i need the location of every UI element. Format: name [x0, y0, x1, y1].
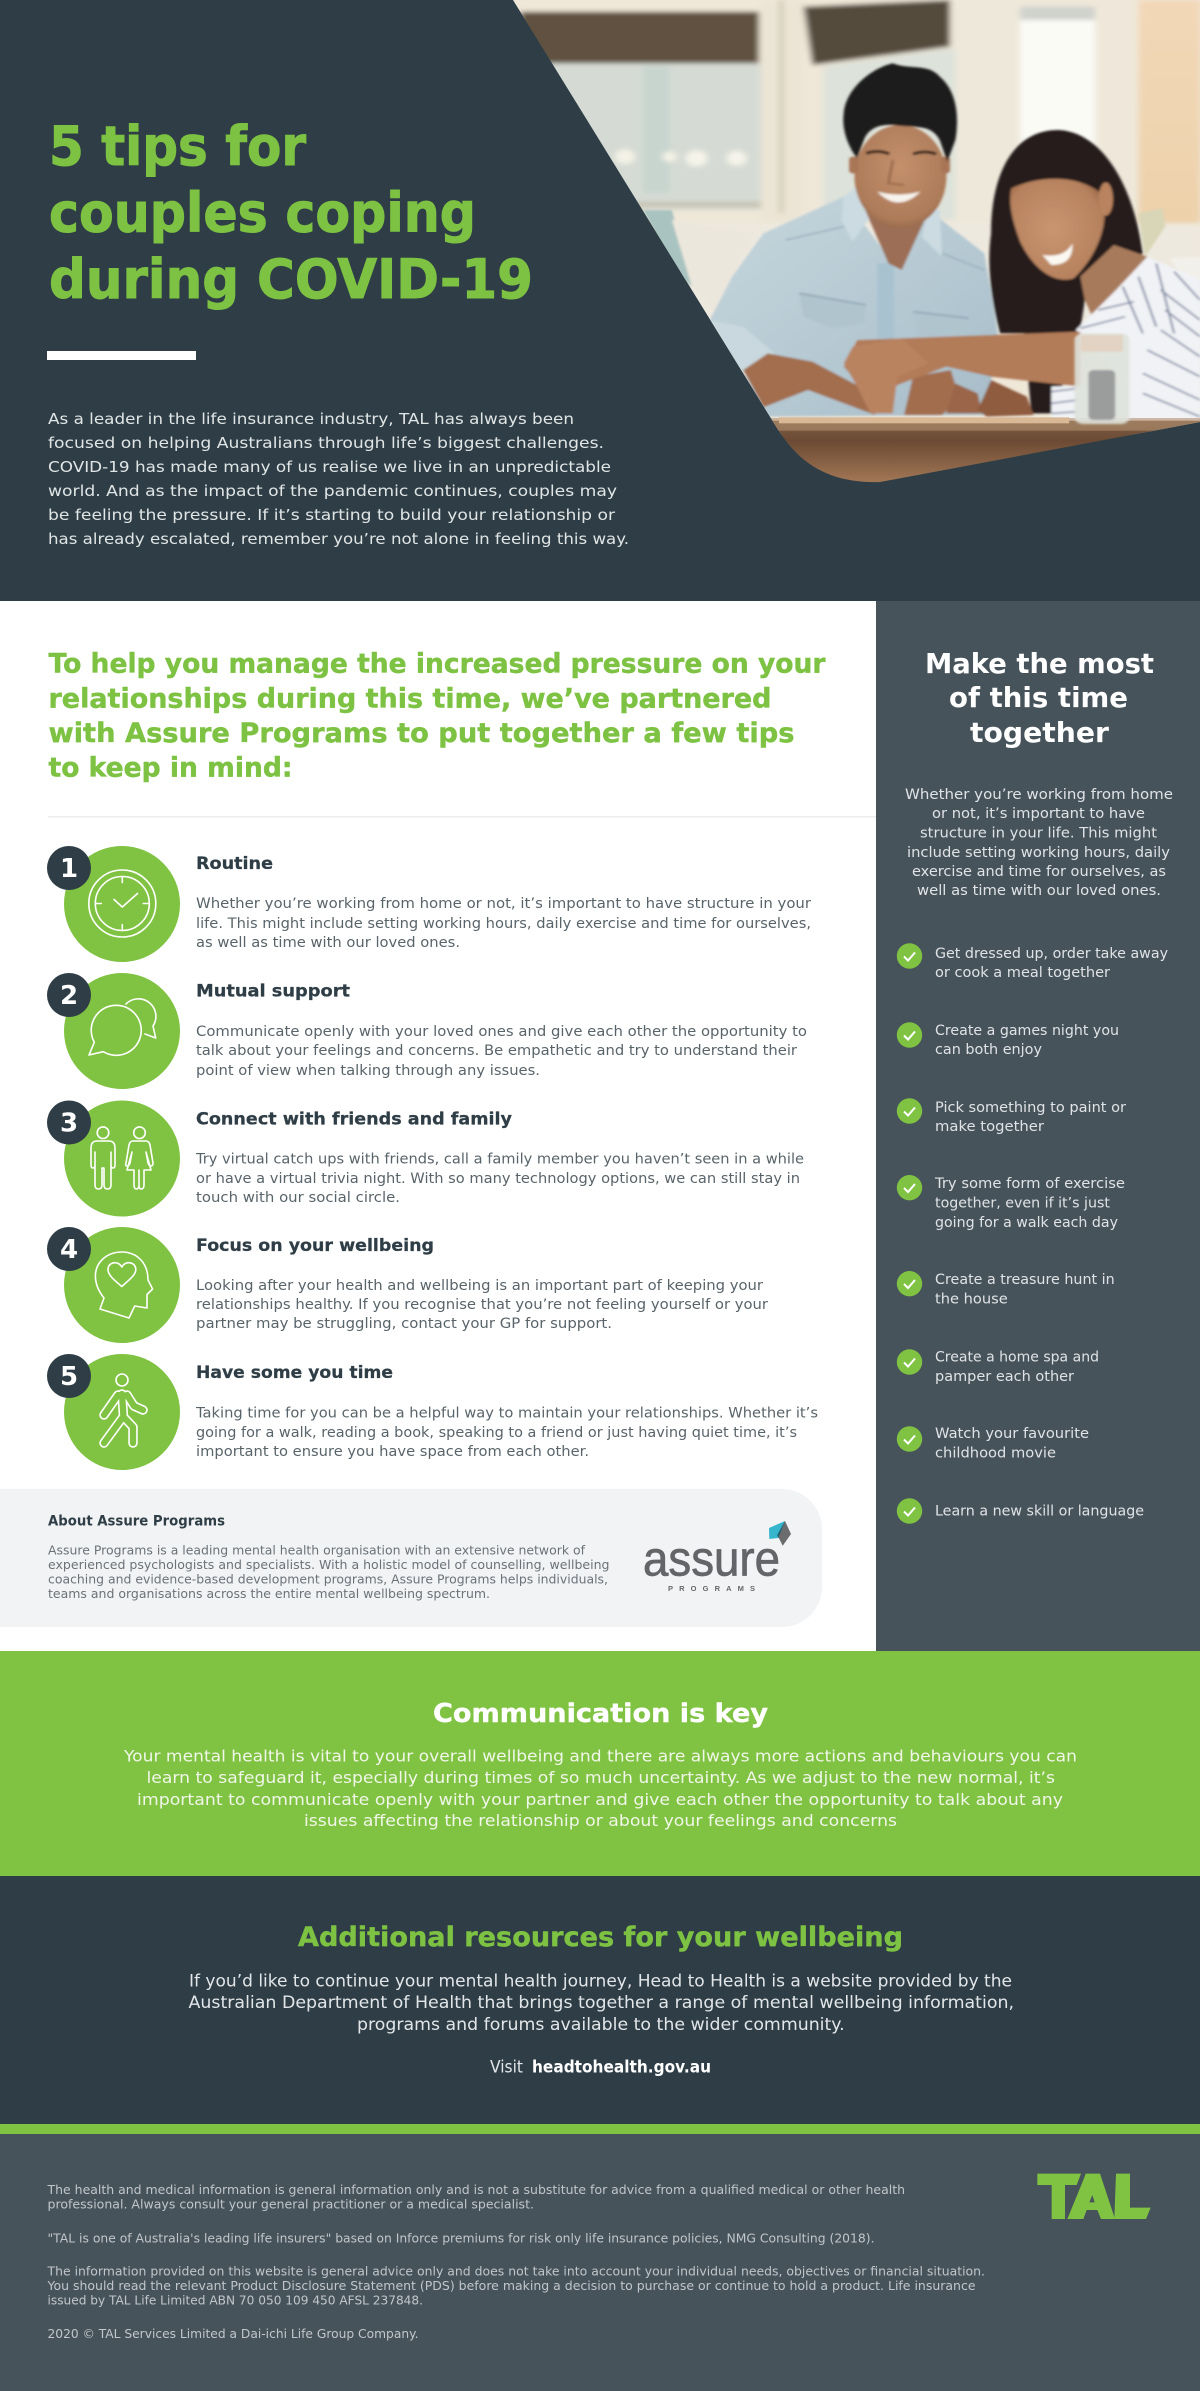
checklist item 5: the house	[935, 1292, 1008, 1308]
tip 4: focus on your wellbeing: 4	[60, 1235, 78, 1265]
intro text: focused on helping Australians through life’s biggest challenges.	[48, 434, 604, 452]
about text: coaching and evidence-based development programs, Assure Programs helps individuals,	[48, 1573, 608, 1587]
communication text	[123, 1747, 1077, 1830]
checklist item 1	[897, 943, 1168, 981]
side heading: of this time	[949, 681, 1128, 714]
tip 3 text	[195, 1109, 804, 1206]
about text: About Assure Programs	[48, 1514, 225, 1530]
tip 4 text: Focus on your wellbeing	[196, 1236, 434, 1256]
side heading: Make the most	[925, 647, 1154, 680]
tip 1 text: Routine	[196, 854, 273, 874]
about text	[48, 1514, 610, 1601]
intro text: be feeling the pressure. If it’s starting to build your relationship or	[48, 506, 616, 524]
resources heading: Additional resources for your wellbeing	[298, 1922, 903, 1953]
tip 1 text: Whether you’re working from home or not, it’s important to have structure in your	[196, 896, 811, 912]
intro text: COVID-19 has made many of us realise we live in an unpredictable	[48, 458, 611, 476]
intro text	[48, 410, 629, 548]
visit link: headtohealth.gov.au	[532, 2058, 711, 2077]
side paragraph: structure in your life. This might	[920, 826, 1158, 842]
man	[710, 197, 998, 417]
visit link: Visit	[490, 2058, 523, 2077]
panel: additional resources	[0, 1876, 1200, 2124]
checklist item 5: Create a treasure hunt in	[935, 1272, 1115, 1288]
photo: smiling couple at a table	[487, 0, 1200, 487]
communication text: Your mental health is vital to your overall wellbeing and there are always more actions and behaviours you can	[123, 1747, 1077, 1766]
section heading: to keep in mind:	[48, 753, 292, 784]
checklist item 6: pamper each other	[935, 1369, 1074, 1385]
tip 5 text: Have some you time	[196, 1363, 393, 1383]
side paragraph: exercise and time for ourselves, as	[912, 864, 1166, 880]
resources text	[188, 1972, 1014, 2034]
resources text: Australian Department of Health that brings together a range of mental wellbeing information,	[188, 1993, 1014, 2012]
communication heading: Communication is key	[433, 1699, 768, 1729]
intro text: world. And as the impact of the pandemic continues, couples may	[48, 482, 617, 500]
tip 3: connect with friends and family	[47, 1100, 804, 1216]
tip 5 text: important to ensure you have space from each other.	[196, 1444, 589, 1460]
checklist item 1: Get dressed up, order take away	[935, 946, 1168, 962]
section heading: with Assure Programs to put together a few tips	[48, 718, 794, 749]
tip 1 text: as well as time with our loved ones.	[196, 935, 460, 951]
disclaimer text: professional. Always consult your general practitioner or a medical specialist.	[48, 2197, 534, 2211]
side heading	[925, 647, 1154, 749]
tip 4 text: partner may be struggling, contact your GP for support.	[196, 1316, 612, 1332]
side paragraph: include setting working hours, daily	[907, 845, 1170, 861]
checklist item 7: childhood movie	[935, 1446, 1056, 1462]
intro text: has already escalated, remember you’re not alone in feeling this way.	[48, 530, 629, 548]
intro text: As a leader in the life insurance industry, TAL has always been	[48, 410, 574, 428]
icon: man and woman	[91, 1127, 153, 1189]
checklist item 6: Create a home spa and	[935, 1350, 1099, 1366]
tip 2 text: point of view when talking through any issues.	[196, 1063, 540, 1079]
tip 2 text	[196, 982, 807, 1079]
logo: Assure Programs: assure	[643, 1533, 780, 1587]
panel: footer	[0, 2134, 1200, 2391]
tip 2 text: Mutual support	[196, 982, 350, 1002]
panel: hero	[0, 0, 1200, 601]
disclaimer text: The information provided on this website is general advice only and does not take into account your individual needs, objectives or financial situation.	[46, 2265, 985, 2279]
tip 5: have some you time	[47, 1354, 818, 1470]
checklist item 4: going for a walk each day	[935, 1215, 1118, 1231]
tip 2 text: Communicate openly with your loved ones and give each other the opportunity to	[196, 1024, 807, 1040]
tip 3 text: Try virtual catch ups with friends, call a family member you haven’t seen in a while	[195, 1152, 804, 1168]
checklist item 2: Create a games night you	[935, 1023, 1119, 1039]
title: during COVID-19	[49, 248, 533, 311]
checklist item 8	[897, 1498, 1144, 1524]
tip 2 text: talk about your feelings and concerns. Be empathetic and try to understand their	[196, 1043, 797, 1059]
communication text: issues affecting the relationship or about your feelings and concerns	[304, 1811, 897, 1830]
section heading	[48, 649, 826, 784]
checklist item 3: Pick something to paint or	[935, 1100, 1126, 1116]
checklist item 3: make together	[935, 1119, 1044, 1135]
tip 2: mutual support	[47, 973, 807, 1089]
title: 5 tips for	[49, 115, 306, 178]
logo: Assure Programs: PROGRAMS	[668, 1584, 755, 1593]
communication text: important to communicate openly with your partner and give each other the opportunity to talk about any	[137, 1790, 1063, 1809]
tip 5 text: Taking time for you can be a helpful way to maintain your relationships. Whether it’s	[195, 1406, 818, 1422]
panel: about Assure Programs	[0, 1489, 822, 1627]
about text: teams and organisations across the entire mental wellbeing spectrum.	[48, 1587, 490, 1601]
checklist item 7	[897, 1426, 1089, 1462]
checklist item 2: can both enjoy	[935, 1042, 1042, 1058]
disclaimer text	[46, 2183, 985, 2341]
title: couples coping	[49, 182, 476, 244]
tip 1: routine	[47, 846, 811, 962]
tip 3 text: Connect with friends and family	[196, 1109, 512, 1129]
about text: Assure Programs is a leading mental health organisation with an extensive network of	[48, 1544, 586, 1558]
panel: make the most of this time together	[876, 601, 1200, 1651]
side paragraph: well as time with our loved ones.	[917, 883, 1161, 899]
tip 5: have some you time: 5	[60, 1362, 78, 1392]
title	[49, 115, 533, 311]
side paragraph	[905, 787, 1173, 899]
icon: speech bubbles	[89, 999, 156, 1055]
side paragraph: or not, it’s important to have	[932, 806, 1145, 822]
tip 4 text	[196, 1236, 768, 1332]
checklist item 7: Watch your favourite	[935, 1426, 1089, 1442]
tip 4: focus on your wellbeing	[47, 1227, 768, 1343]
about text: experienced psychologists and specialists. With a holistic model of counselling, wellbeing	[48, 1558, 610, 1572]
tip 3 text: or have a virtual trivia night. With so many technology options, we can still stay in	[196, 1171, 800, 1187]
tip 4 text: relationships healthy. If you recognise that you’re not feeling yourself or your	[196, 1297, 768, 1313]
tip 2: mutual support: 2	[60, 981, 78, 1011]
disclaimer text: 2020 © TAL Services Limited a Dai-ichi Life Group Company.	[48, 2327, 418, 2341]
checklist item 8: Learn a new skill or language	[935, 1504, 1144, 1520]
title underline bar	[47, 351, 196, 360]
disclaimer text: issued by TAL Life Limited ABN 70 050 109 450 AFSL 237848.	[48, 2293, 423, 2307]
tip 5 text: going for a walk, reading a book, speaking to a friend or just having quiet time, it’s	[196, 1425, 797, 1441]
icon: head with heart	[95, 1252, 153, 1318]
tip 1 text	[196, 854, 811, 951]
woman	[989, 130, 1143, 413]
tip 1 text: life. This might include setting working hours, daily exercise and time for ourselves,	[196, 916, 811, 932]
checklist item 5	[897, 1271, 1115, 1308]
checklist item 2	[897, 1022, 1119, 1058]
logo: TAL	[1037, 2174, 1151, 2219]
disclaimer text: "TAL is one of Australia's leading life insurers" based on Inforce premiums for risk only life insurance policies, NMG Consulting (2018).	[48, 2231, 874, 2245]
icon: walking person	[104, 1374, 143, 1443]
checklist item 4: together, even if it’s just	[935, 1196, 1111, 1212]
panel: tips section	[0, 601, 876, 1651]
disclaimer text: You should read the relevant Product Disclosure Statement (PDS) before making a decision to purchase or continue to hold a product. Life insurance	[46, 2279, 976, 2293]
tip 4 text: Looking after your health and wellbeing is an important part of keeping your	[196, 1278, 763, 1294]
resources text: programs and forums available to the wider community.	[357, 2015, 845, 2034]
side heading: together	[970, 716, 1109, 749]
section heading: relationships during this time, we’ve partnered	[48, 683, 772, 714]
icon: clock	[89, 870, 156, 937]
tip 3 text: touch with our social circle.	[196, 1190, 400, 1206]
panel: communication is key	[0, 1651, 1200, 1876]
checklist item 4	[897, 1175, 1125, 1231]
checklist item 6	[897, 1349, 1099, 1385]
checklist item 4: Try some form of exercise	[934, 1176, 1125, 1192]
tip 5 text	[195, 1363, 818, 1460]
section heading: To help you manage the increased pressure on your	[48, 649, 826, 680]
tip 1: routine: 1	[60, 854, 78, 884]
side paragraph: Whether you’re working from home	[905, 787, 1173, 803]
checklist item 1: or cook a meal together	[935, 965, 1110, 981]
checklist item 3	[897, 1098, 1126, 1135]
disclaimer text: The health and medical information is general information only and is not a substitute for advice from a qualified medical or other health	[46, 2183, 905, 2197]
resources text: If you’d like to continue your mental health journey, Head to Health is a website provided by the	[189, 1972, 1012, 1991]
tip 3: connect with friends and family: 3	[60, 1108, 78, 1138]
communication text: learn to safeguard it, especially during times of so much uncertainty. As we adjust to the new normal, it’s	[146, 1768, 1055, 1787]
